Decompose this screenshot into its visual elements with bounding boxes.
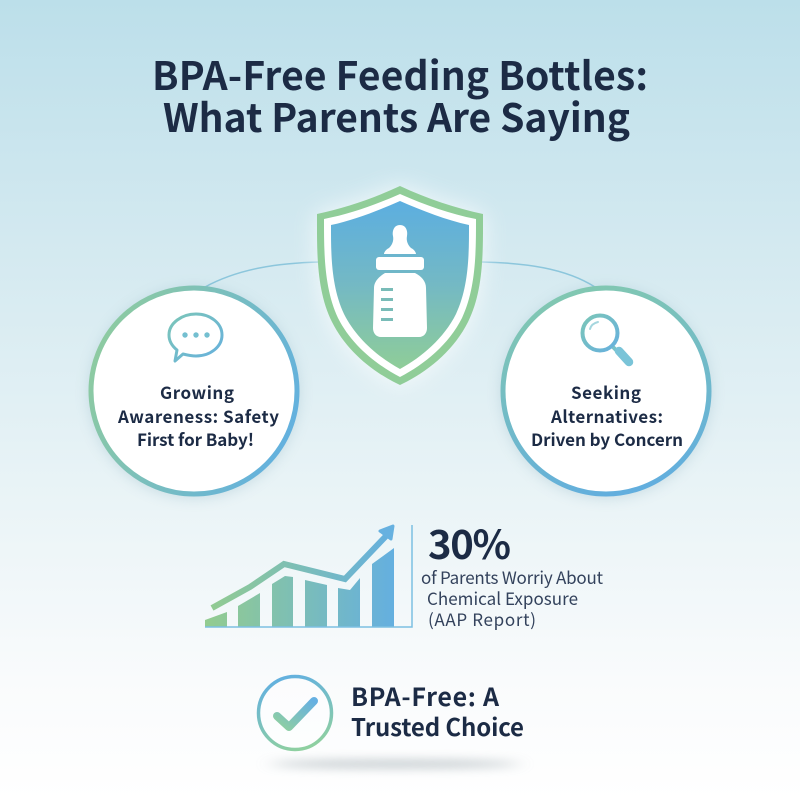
icon: check mark badge bbox=[258, 676, 332, 750]
ground shadow bbox=[270, 760, 520, 768]
text: seeking alternatives: Alternatives: bbox=[550, 403, 663, 428]
icon: shield with baby bottle bbox=[317, 186, 483, 385]
text: trusted choice bbox=[351, 678, 524, 743]
icon: speech bubble bbox=[169, 314, 222, 361]
stat description: Chemical Exposure bbox=[427, 585, 578, 610]
text: trusted choice: BPA-Free: A bbox=[351, 678, 500, 714]
text: growing awareness: First for Baby! bbox=[137, 426, 254, 451]
text: seeking alternatives: Seeking bbox=[571, 379, 641, 404]
title: BPA-Free Feeding Bottles: bbox=[152, 46, 648, 102]
text: growing awareness: Growing bbox=[160, 379, 234, 404]
text: trusted choice: Trusted Choice bbox=[351, 708, 524, 743]
bar chart with rising arrow bbox=[205, 525, 412, 627]
text: seeking alternatives bbox=[531, 379, 683, 451]
text: seeking alternatives: Driven by Concern bbox=[531, 426, 683, 451]
panel: seeking alternatives bbox=[501, 288, 711, 498]
text: growing awareness: Awareness: Safety bbox=[117, 403, 279, 428]
title: What Parents Are Saying bbox=[163, 88, 630, 144]
text: growing awareness bbox=[117, 379, 279, 451]
stat description bbox=[421, 564, 604, 631]
icon: magnifying glass bbox=[582, 316, 629, 362]
stat: 30%: 30% bbox=[428, 513, 511, 571]
connector: shield to right circle bbox=[482, 262, 595, 287]
connector: shield to left circle bbox=[205, 262, 320, 287]
stat description: of Parents Worriy About bbox=[421, 564, 604, 589]
stat description: (AAP Report) bbox=[428, 606, 536, 631]
panel: growing awareness bbox=[89, 288, 299, 498]
icon: baby bottle bbox=[373, 225, 427, 337]
title bbox=[152, 46, 648, 144]
